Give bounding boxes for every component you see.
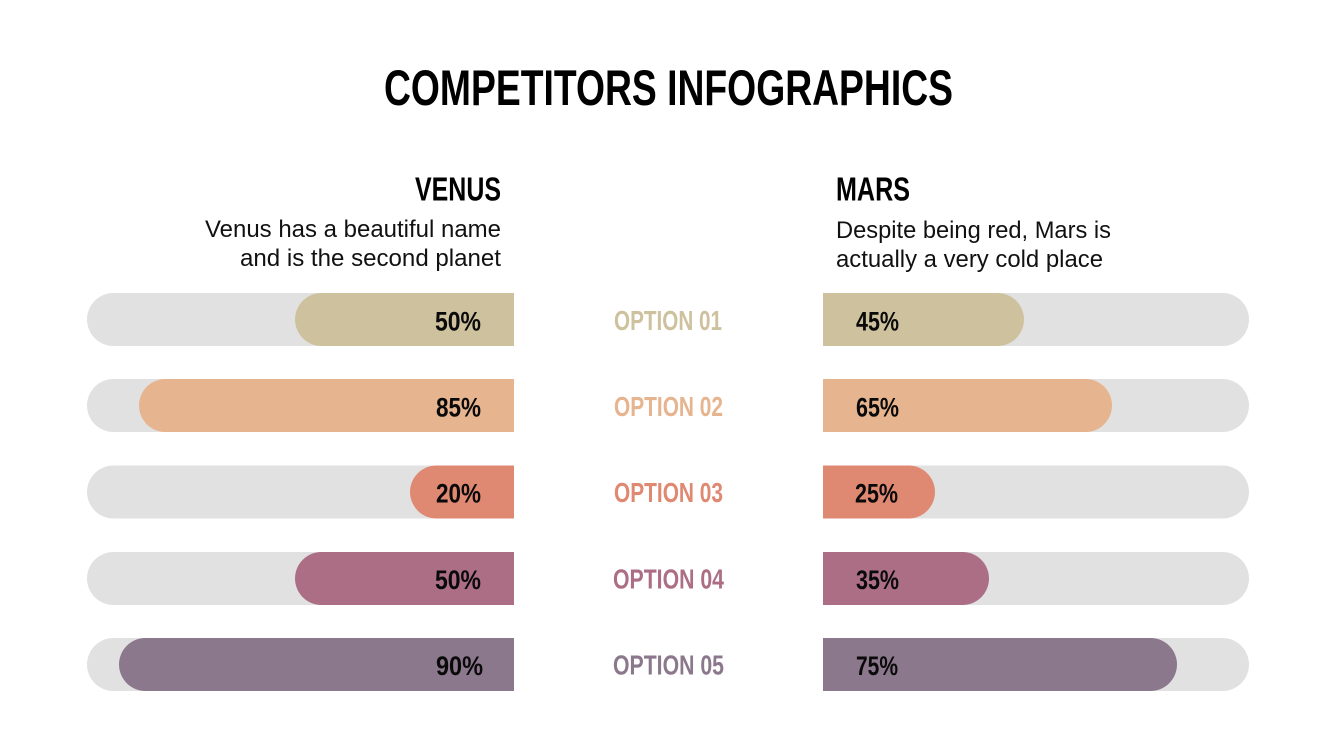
chart row: option 03	[87, 466, 1249, 518]
chart row: option 05	[87, 638, 1249, 691]
label: option 03: OPTION 03	[614, 477, 723, 508]
chart row: option 02	[87, 379, 1249, 432]
venus bar 50%: 50%	[435, 306, 481, 336]
chart row: option 04	[87, 552, 1249, 605]
mars bar 45%: 45%	[856, 306, 899, 336]
mars bar 25%	[823, 466, 1249, 518]
text block: mars description: Despite being red, Mars is	[836, 217, 1111, 244]
mars bar 25%: 25%	[855, 478, 898, 508]
mars bar 35%: 35%	[856, 565, 899, 595]
mars bar 75%	[823, 638, 1249, 691]
venus bar 90%: 90%	[436, 651, 483, 681]
mars bar 65%	[823, 379, 1249, 432]
label: option 04: OPTION 04	[613, 564, 725, 594]
heading: mars: MARS	[836, 170, 910, 208]
venus bar 20%: 20%	[436, 478, 481, 508]
text block: venus description: and is the second planet	[240, 245, 501, 272]
text block: venus description: Venus has a beautiful name	[205, 216, 501, 243]
venus bar 50%	[87, 293, 514, 346]
label: option 01: OPTION 01	[614, 305, 722, 336]
mars bar 45%	[823, 293, 1249, 346]
mars bar 75%: 75%	[856, 651, 898, 681]
label: option 05: OPTION 05	[613, 650, 724, 680]
venus bar 50%: 50%	[435, 565, 481, 595]
mars bar 65%: 65%	[856, 392, 899, 422]
title: COMPETITORS INFOGRAPHICS	[384, 60, 953, 116]
text block: venus description	[205, 216, 501, 272]
panel: mars heading and description	[836, 170, 1111, 273]
mars bar 35%	[823, 552, 1249, 605]
heading: venus: VENUS	[415, 170, 501, 208]
panel: venus heading and description	[205, 170, 501, 272]
text block: mars description: actually a very cold place	[836, 246, 1103, 273]
venus bar 20%	[87, 466, 514, 518]
label: option 02: OPTION 02	[614, 391, 723, 422]
venus bar 50%	[87, 552, 514, 605]
venus bar 90%	[87, 638, 514, 691]
venus bar 85%: 85%	[436, 392, 481, 422]
venus bar 85%	[87, 379, 514, 432]
text block: mars description	[836, 217, 1111, 273]
chart row: option 01	[87, 293, 1249, 346]
